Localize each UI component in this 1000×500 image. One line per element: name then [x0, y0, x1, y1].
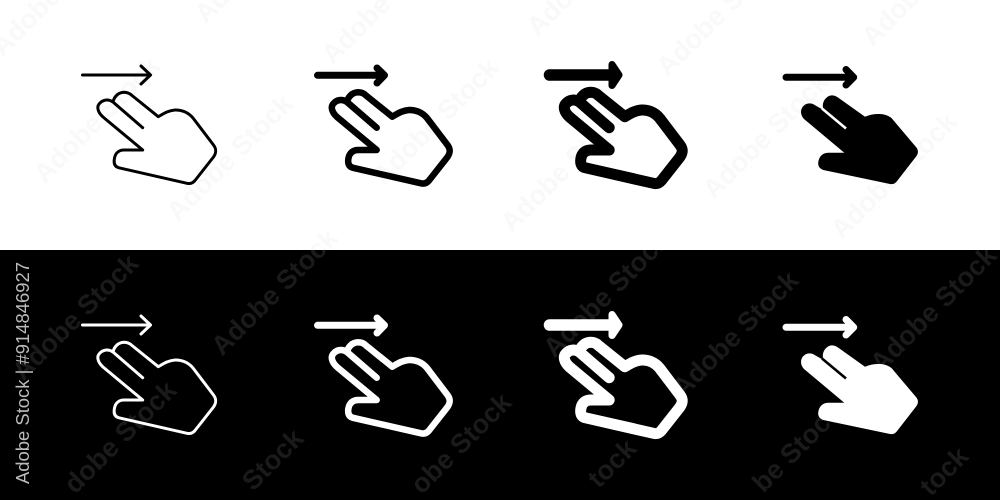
watermarks on white panel: Adobe Stock: [28, 50, 166, 189]
watermarks on black panel: [16, 250, 998, 494]
white background panel: [0, 0, 1000, 250]
icon: bottom row solid hand with arrow: [786, 320, 918, 434]
stock credit text: Adobe Stock | #914846927: [13, 262, 33, 484]
watermarks on white panel: Adobe Stock: [161, 88, 299, 227]
watermarks on black panel: Adobe Stock: [864, 239, 1000, 378]
watermarks on black panel: tock: [582, 432, 643, 494]
watermarks on black panel: dobe Stock: [58, 374, 183, 499]
watermarks on black panel: tock: [914, 440, 975, 500]
watermarks on white panel: [108, 66, 911, 189]
icon: bottom row medium outline hand with arrow: [318, 318, 450, 434]
watermarks on white panel: Adobe Stock: [367, 52, 505, 191]
watermarks on black panel: be Stock: [746, 396, 848, 498]
icon: top row solid hand with arrow: [786, 70, 918, 184]
watermarks on white panel: Adobe Stock: [495, 99, 633, 238]
icon: top row medium outline hand with arrow: [318, 68, 450, 184]
watermarks on black panel: Adobe Stock: [537, 224, 676, 363]
icon: bottom row bold outline hand with arrow: [550, 314, 682, 434]
watermarks on black panel: Stock: [236, 422, 310, 496]
watermarks on black panel: Adobe Stock: [6, 247, 145, 386]
icon: top row bold outline hand with arrow: [550, 64, 682, 184]
watermarks on black panel: obe Stock: [405, 386, 518, 499]
watermarks on white panel: Adobe Stock: [697, 66, 835, 205]
icon: top row thin outline hand with arrow: [82, 66, 216, 184]
watermarks on white panel: Adobe Stock: [825, 106, 963, 245]
watermarks on white panel: Adobe Stock: [206, 222, 344, 361]
watermarks on black panel: Adobe Stock: [666, 264, 805, 403]
black background panel: [0, 250, 1000, 500]
icon: bottom row thin outline hand with arrow: [82, 316, 216, 434]
watermarks on black panel: Adobe Stock: [205, 222, 344, 361]
